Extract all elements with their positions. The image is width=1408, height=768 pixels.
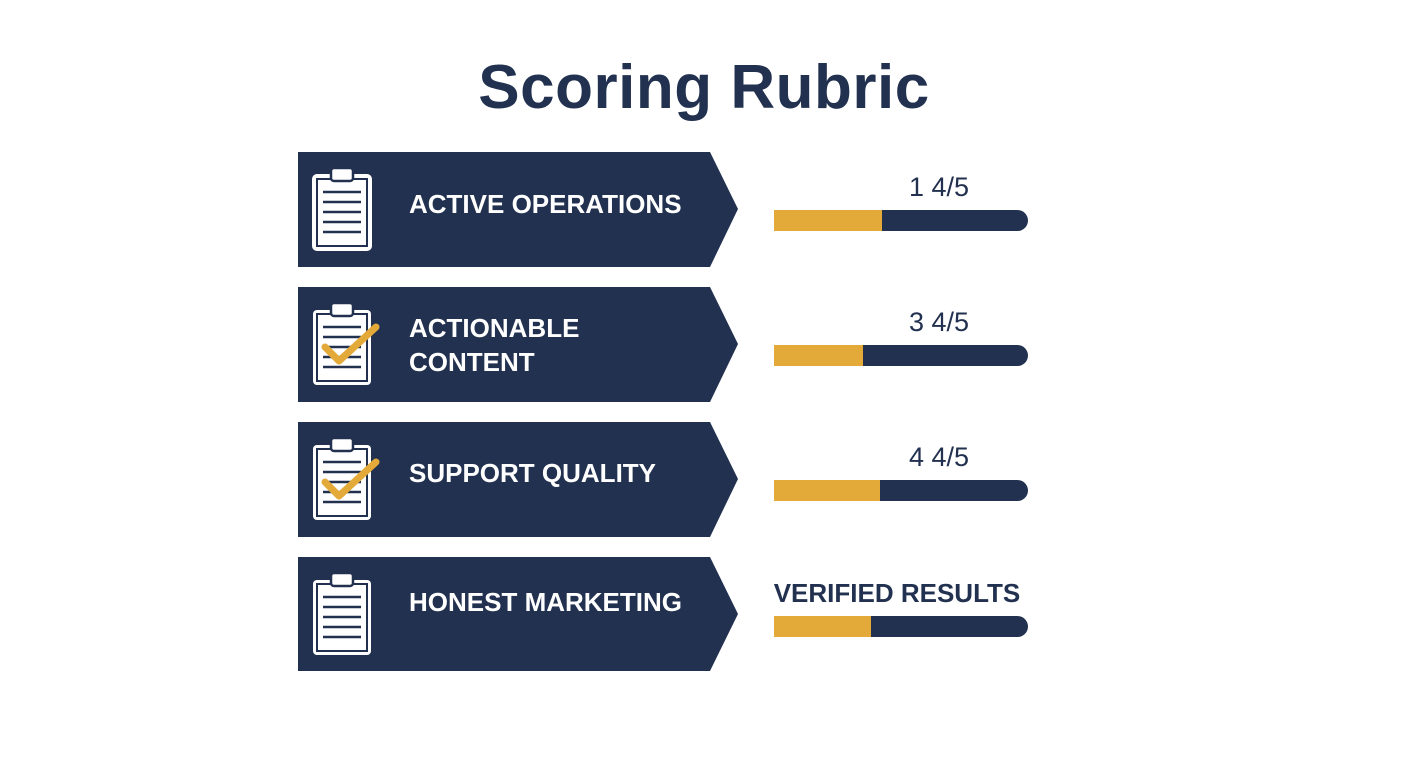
score 1: 1 4/5 (909, 172, 969, 202)
row 3: support quality (298, 422, 738, 537)
bar 1 (774, 210, 1028, 231)
bar 4 (774, 616, 1028, 637)
label (409, 313, 579, 377)
bar 2 (774, 345, 1028, 366)
score 3: 4 4/5 (909, 442, 969, 472)
row 1: active operations (298, 152, 738, 267)
icon: clipboard with check (313, 304, 380, 385)
bar 3 (774, 480, 1028, 501)
row 4: honest marketing (298, 557, 738, 671)
icon: clipboard with check (313, 439, 380, 520)
label: SUPPORT QUALITY (409, 458, 656, 488)
title: Scoring Rubric (478, 53, 930, 122)
label: HONEST MARKETING (409, 587, 682, 617)
icon: clipboard (313, 574, 371, 655)
score 2: 3 4/5 (909, 307, 969, 337)
score 4 label: VERIFIED RESULTS (774, 578, 1020, 608)
label: ACTIONABLE (409, 313, 579, 343)
label: ACTIVE OPERATIONS (409, 189, 682, 219)
label: CONTENT (409, 347, 535, 377)
icon: clipboard (312, 169, 372, 251)
row 2: actionable content (298, 287, 738, 402)
